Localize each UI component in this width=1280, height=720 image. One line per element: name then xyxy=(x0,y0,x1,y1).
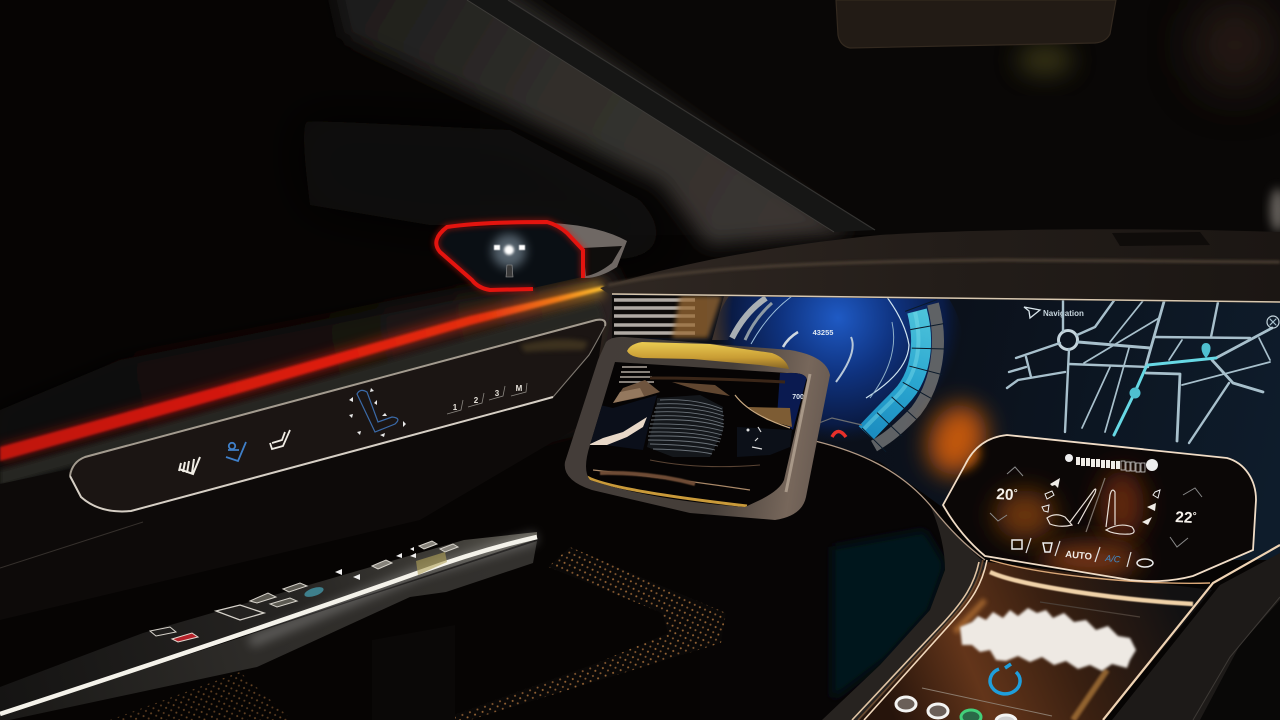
lower chrome wisps xyxy=(587,460,760,506)
seat position control xyxy=(349,388,406,437)
steering wheel xyxy=(565,337,830,520)
power icon xyxy=(990,664,1020,694)
speaker grille xyxy=(110,547,726,720)
right temperature: 22 xyxy=(1175,509,1193,527)
icon: seat heat xyxy=(179,457,200,474)
air vent stripes xyxy=(612,296,748,340)
console left edge xyxy=(864,560,987,720)
memory seat buttons: 1 xyxy=(453,403,458,412)
right button pad xyxy=(737,427,792,457)
sound wave white blob xyxy=(960,608,1136,671)
map pins xyxy=(1130,343,1210,398)
display top edge light xyxy=(612,294,1280,302)
mirror reflection xyxy=(492,234,526,277)
wheel frame xyxy=(565,337,830,520)
red mirror outline xyxy=(436,222,583,290)
mirror housing xyxy=(553,223,627,278)
door trim seat control panel xyxy=(69,320,605,511)
side mirror xyxy=(436,222,627,290)
blue display seen through wheel: 7000 xyxy=(792,394,808,401)
seat airflow diagram xyxy=(1047,478,1134,534)
ribbed center drum xyxy=(647,395,724,457)
climate control panel xyxy=(930,432,1256,581)
windshield and background lights xyxy=(480,0,1280,235)
console glow strip xyxy=(990,572,1193,604)
gold trim tab xyxy=(416,552,447,575)
console buttons xyxy=(896,697,1016,720)
left dark spoke xyxy=(590,395,657,450)
cyan ring xyxy=(866,311,921,433)
binnacle edge highlight xyxy=(815,441,985,560)
memory seat buttons xyxy=(447,383,527,414)
white chrome swoosh xyxy=(588,417,647,445)
switch arrows xyxy=(335,547,416,580)
window switches xyxy=(150,541,458,642)
climate function buttons xyxy=(1012,538,1153,567)
outer grey ring xyxy=(874,304,938,446)
main display xyxy=(612,293,1280,560)
climate function buttons: AUTO xyxy=(1065,549,1092,563)
navigation heading: Navigation xyxy=(1043,309,1084,318)
blue display seen through wheel xyxy=(777,373,808,430)
A-pillar trim xyxy=(330,0,875,245)
taupe console surround xyxy=(822,505,988,720)
yellow top bar xyxy=(627,342,789,369)
red phone icon xyxy=(832,432,846,437)
lower door body xyxy=(0,322,604,620)
wheel window xyxy=(586,362,807,507)
grey door band below red light xyxy=(0,302,604,486)
speedometer gauge xyxy=(732,292,938,446)
right armrest xyxy=(1103,545,1280,720)
memory seat buttons: M xyxy=(516,384,523,393)
navigation map xyxy=(1007,293,1279,443)
cyan route xyxy=(1114,358,1216,435)
odometer text: 43255 xyxy=(813,328,833,337)
chrome reflections xyxy=(613,378,792,428)
left temperature: 20 xyxy=(996,486,1014,504)
lower door pull line xyxy=(0,522,143,568)
left temperature: ° xyxy=(1013,488,1018,499)
center console xyxy=(852,560,1212,720)
airflow arrows xyxy=(1042,478,1160,525)
interior side glass shade xyxy=(300,120,680,268)
vent reflection xyxy=(619,367,654,382)
orange glow behind display xyxy=(918,397,996,483)
right temperature xyxy=(1170,488,1202,547)
door upper surface xyxy=(0,268,625,520)
climate function buttons: A/C xyxy=(1104,553,1121,565)
icon: seat massage xyxy=(270,430,290,449)
navigation heading xyxy=(1024,307,1084,318)
mirror glass xyxy=(439,224,582,288)
door switch strip xyxy=(0,532,537,720)
gold bottom arc xyxy=(587,477,747,506)
fan speed bar xyxy=(1065,454,1158,472)
left temperature xyxy=(990,467,1023,521)
instrument binnacle curve xyxy=(700,441,988,720)
right temperature: ° xyxy=(1192,511,1197,522)
wheel frame right highlight xyxy=(786,374,810,492)
icon: seat ventilation blue xyxy=(226,442,246,461)
dashboard top xyxy=(600,229,1280,304)
footwell teal shade xyxy=(832,530,946,700)
rear-view mirror xyxy=(836,0,1116,48)
memory seat buttons: 3 xyxy=(495,389,500,398)
memory seat buttons: 2 xyxy=(474,396,479,405)
blue gauge glow xyxy=(716,296,958,438)
door pocket reflections xyxy=(372,625,455,720)
ambient red light strip xyxy=(0,286,604,461)
